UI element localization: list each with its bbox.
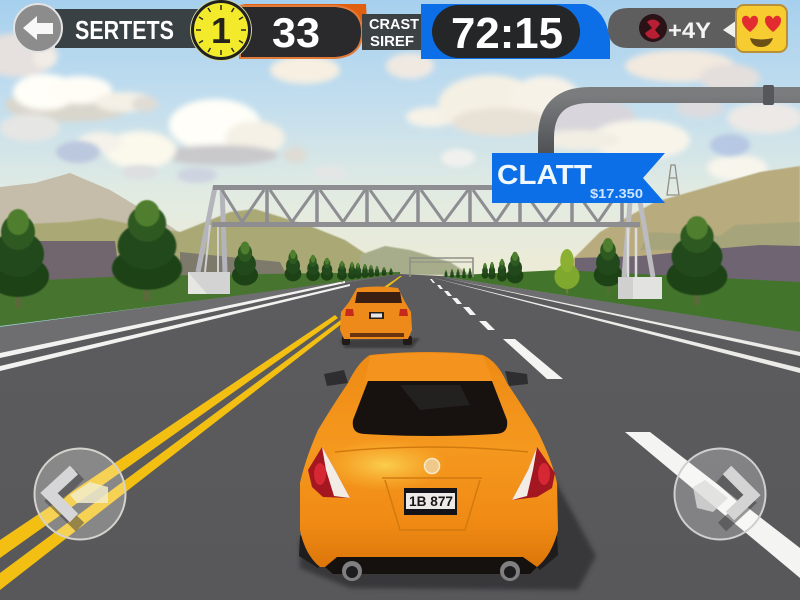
gantry left tower bbox=[188, 187, 230, 294]
HUD: mode bar: SERTETS bbox=[75, 15, 174, 45]
sign: CLATT: CLATT bbox=[497, 159, 592, 190]
overhead gantry truss bbox=[188, 187, 662, 299]
licence plate bbox=[404, 488, 457, 515]
white lane dashes bbox=[430, 279, 800, 578]
double yellow centre line bbox=[0, 276, 402, 590]
grass right bbox=[440, 270, 800, 332]
HUD: bonus pill: +4Y bbox=[668, 18, 711, 43]
right exhaust bbox=[500, 561, 520, 581]
HUD: label panel bbox=[362, 14, 424, 50]
HUD: timer panel bbox=[421, 4, 610, 59]
body highlight bbox=[323, 439, 447, 491]
left white edge lines bbox=[0, 281, 350, 371]
trunk crease bbox=[335, 447, 528, 530]
roadside trees right bbox=[444, 216, 727, 305]
badge bbox=[424, 458, 440, 474]
roadside trees left bbox=[0, 200, 393, 308]
wheels bbox=[299, 535, 558, 570]
clouds bbox=[0, 33, 800, 183]
rear window bbox=[353, 381, 507, 436]
gantry chords and diagonals bbox=[212, 188, 640, 224]
left mirror bbox=[324, 370, 348, 386]
HUD: mode bar bbox=[55, 9, 200, 48]
right tail light bbox=[512, 447, 555, 500]
left steering control bbox=[34, 448, 126, 540]
right steering control bbox=[674, 448, 766, 540]
body bbox=[300, 352, 558, 567]
orange car ahead bbox=[340, 286, 420, 348]
right mountains bbox=[570, 166, 800, 286]
right white edge lines bbox=[430, 277, 800, 373]
HUD: score panel bbox=[240, 4, 367, 58]
HUD: heart-eyes emoji bbox=[736, 5, 787, 52]
rear bumper recess bbox=[325, 557, 537, 574]
HUD: back button bbox=[14, 4, 62, 52]
roof bbox=[365, 353, 493, 381]
licence plate: 1B 877 bbox=[409, 493, 453, 509]
left mountains bbox=[0, 173, 470, 290]
right mirror bbox=[505, 371, 528, 386]
gantry right tower bbox=[618, 190, 662, 299]
sky bbox=[0, 0, 800, 300]
HUD: label panel: SIREF bbox=[370, 33, 414, 50]
main car shadow bbox=[300, 480, 596, 590]
left tail light bbox=[308, 447, 350, 498]
sign: CLATT: $17.350 bbox=[590, 186, 643, 201]
pole collar bbox=[763, 85, 774, 105]
road surface bbox=[0, 274, 800, 600]
HUD: score panel: 33 bbox=[272, 9, 320, 56]
HUD: label panel: CRAST bbox=[369, 16, 419, 33]
road shoulders bbox=[0, 274, 800, 355]
distant gantry bbox=[410, 258, 473, 277]
HUD: bonus pill bbox=[608, 8, 740, 48]
distant pylon bbox=[667, 165, 679, 195]
left exhaust bbox=[342, 561, 362, 581]
HUD: timer panel: 72:15 bbox=[451, 9, 563, 58]
sign: CLATT bbox=[492, 153, 665, 203]
main orange car bbox=[299, 352, 558, 581]
grass left bbox=[0, 272, 400, 326]
HUD: lap clock: 1 bbox=[211, 10, 231, 51]
signal pole arm bbox=[546, 95, 800, 160]
HUD: lap clock bbox=[190, 0, 252, 61]
